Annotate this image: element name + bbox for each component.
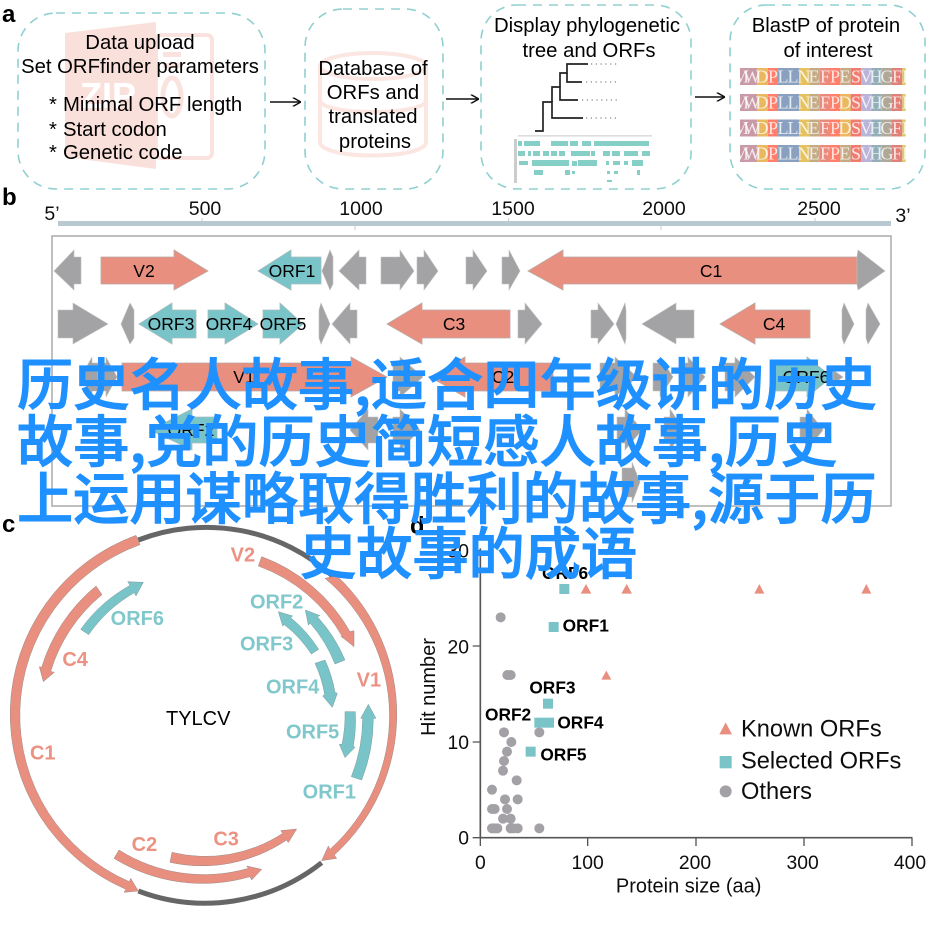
circular map labels: V1: [357, 670, 381, 692]
ORF row 1: V2: [133, 261, 155, 281]
text: data upload settings: Genetic code: [63, 142, 183, 164]
text: data upload settings: [21, 32, 259, 164]
point labels: ORF6: [542, 563, 589, 583]
axes: 0: [458, 829, 469, 850]
ORF row 3: [81, 357, 843, 397]
circular map labels: ORF5: [286, 721, 339, 743]
icon: faded zip file: ZIP: [80, 75, 136, 116]
ruler: 3’: [895, 205, 911, 227]
panel letter d: d: [410, 512, 425, 539]
axes: 10: [447, 733, 469, 754]
ORF row 4: [150, 409, 823, 450]
step 2: database box: [305, 9, 443, 189]
ruler: 1500: [491, 198, 535, 220]
panel letter c: c: [2, 511, 15, 538]
ORF row 5: [622, 462, 640, 503]
panel c: circular genome: [2, 511, 397, 903]
sequence alignment row 4: MWDPLLNEFPESVHGFI: [733, 144, 908, 164]
point labels: ORF4: [557, 712, 604, 732]
step 3: phylogenetic tree box: [481, 5, 691, 189]
step 1: data upload box: [18, 13, 265, 189]
arc: C1: [10, 535, 140, 892]
step 4: BlastP box: [730, 5, 925, 189]
ruler: 1000: [339, 198, 383, 220]
text: BlastP heading: of interest: [783, 40, 873, 62]
axes: [418, 541, 926, 898]
ORF row 2: ORF5: [260, 314, 306, 334]
ruler: 2000: [642, 198, 686, 220]
panel b: genome ORF map: [2, 184, 911, 506]
ORF map frame: [52, 236, 891, 506]
point labels: ORF3: [529, 677, 576, 697]
arc: ORF1: [351, 704, 376, 780]
arrow: step 1 to 2: [270, 101, 300, 103]
arc: ORF3: [278, 612, 319, 654]
axes: 400: [894, 853, 926, 874]
title overlay banner: 史故事的成语: [300, 510, 637, 591]
text: database of ORFs: proteins: [339, 131, 411, 153]
text: display tree heading: tree and ORFs: [522, 40, 656, 62]
circular map labels: [30, 545, 381, 856]
sequence alignment row 1: MWDPLLNEFPESVHGFI: [733, 66, 908, 86]
panel letter a: a: [2, 1, 16, 28]
panel letter b: b: [2, 184, 17, 211]
ORF row 2: C3: [443, 314, 465, 334]
ORF track map: [514, 136, 652, 183]
title overlay banner: 上运用谋略取得胜利的故事,源于历: [17, 455, 877, 536]
text: data upload settings: Start codon: [63, 119, 167, 141]
text: database of ORFs: translated: [328, 106, 418, 128]
axes: 30: [447, 541, 469, 562]
axes: 200: [679, 853, 711, 874]
arrow: step 3 to 4: [695, 96, 724, 98]
title overlay banner: 历史名人故事,适合四年级讲的历史: [17, 341, 877, 422]
arc: ORF2: [305, 610, 345, 664]
ORF row 1: [54, 250, 885, 290]
text: BlastP heading: BlastP of protein: [752, 15, 900, 37]
point labels: ORF2: [485, 704, 531, 724]
text: database of ORFs: [318, 58, 428, 153]
axes: 100: [572, 853, 604, 874]
ruler: 500: [189, 198, 221, 220]
circular map labels: V2: [231, 545, 255, 567]
icon: faded zip file: [65, 22, 212, 169]
circular map labels: ORF3: [240, 634, 293, 656]
arc: V2: [258, 557, 354, 647]
legend: Selected ORFs: [741, 749, 901, 775]
ORF row 2: ORF3: [148, 314, 194, 334]
ORF row 2: ORF4: [206, 314, 253, 334]
arrow: step 2 to 3: [446, 98, 478, 100]
ORF row 3: ORF6: [783, 367, 829, 387]
arc: C2: [114, 850, 262, 883]
ruler: 5’: [44, 203, 60, 225]
dark arc: top intergenic region: [138, 527, 333, 577]
legend: [719, 717, 901, 805]
text: display tree heading: [494, 15, 680, 62]
ORF row 4: ORF2: [168, 420, 214, 440]
text: data upload settings: Set ORFfinder parameters: [21, 56, 259, 78]
circular map labels: C2: [132, 834, 157, 856]
points: others: [487, 612, 544, 833]
ORF row 3: C2: [492, 367, 514, 387]
axes: 0: [475, 853, 486, 874]
arc: V1: [322, 576, 397, 861]
ORF row 2: C4: [763, 314, 785, 334]
axes: Protein size (aa): [616, 876, 761, 898]
axes: 300: [787, 853, 819, 874]
text: data upload settings: *: [49, 142, 57, 164]
arc: C4: [39, 586, 102, 682]
ORF row 1: ORF1: [269, 261, 315, 281]
icon: faded database cylinder: [320, 53, 426, 156]
points: known ORFs: [581, 584, 871, 680]
text: data upload settings: *: [49, 94, 57, 116]
ORF row 2: [58, 303, 880, 344]
circular map labels: ORF4: [266, 676, 319, 698]
arc: ORF4: [315, 660, 337, 707]
phylogenetic tree: [535, 64, 619, 131]
panel a: workflow: [2, 1, 925, 189]
sequence alignment row 3: MWDPLLNEFPDSVHGFI: [733, 118, 908, 138]
circular map labels: C3: [213, 828, 239, 850]
panel d: scatter plot: [410, 512, 926, 898]
text: database of ORFs: Database of: [318, 58, 428, 80]
sequence alignment row 2: MWDPLLNEFPDSVHGFI: [733, 92, 908, 112]
legend: Others: [741, 779, 812, 805]
circular map labels: ORF1: [303, 781, 356, 803]
title overlay banner: [17, 341, 877, 591]
title overlay banner: 故事,党的历史简短感人故事,历史: [17, 398, 837, 479]
circular map labels: C4: [62, 649, 88, 671]
dark arc: bottom intergenic region: [138, 863, 322, 903]
arc: ORF6: [81, 582, 143, 635]
text: BlastP heading: [752, 15, 900, 62]
arc: ORF5: [339, 712, 356, 758]
point labels: ORF5: [540, 744, 587, 764]
circular map labels: ORF2: [250, 591, 303, 613]
circular map labels: ORF6: [111, 608, 164, 630]
ORF row 3: V1: [233, 367, 255, 387]
circular map labels: TYLCV: [166, 708, 231, 730]
circular map labels: C1: [30, 742, 56, 764]
legend: Known ORFs: [741, 717, 882, 743]
ruler: [44, 198, 911, 230]
text: data upload settings: Minimal ORF length: [63, 94, 242, 116]
ruler: 2500: [797, 198, 841, 220]
arc: C3: [170, 829, 297, 866]
point labels: [485, 563, 609, 764]
text: data upload settings: Data upload: [85, 32, 195, 54]
text: display tree heading: Display phylogenetic: [494, 15, 680, 37]
text: database of ORFs: ORFs and: [327, 82, 419, 104]
ORF row 1: C1: [700, 261, 722, 281]
text: data upload settings: *: [49, 119, 57, 141]
point labels: ORF1: [563, 615, 609, 635]
points: selected ORFs: [526, 584, 569, 757]
axes: 20: [447, 637, 469, 658]
axes: Hit number: [418, 638, 440, 736]
